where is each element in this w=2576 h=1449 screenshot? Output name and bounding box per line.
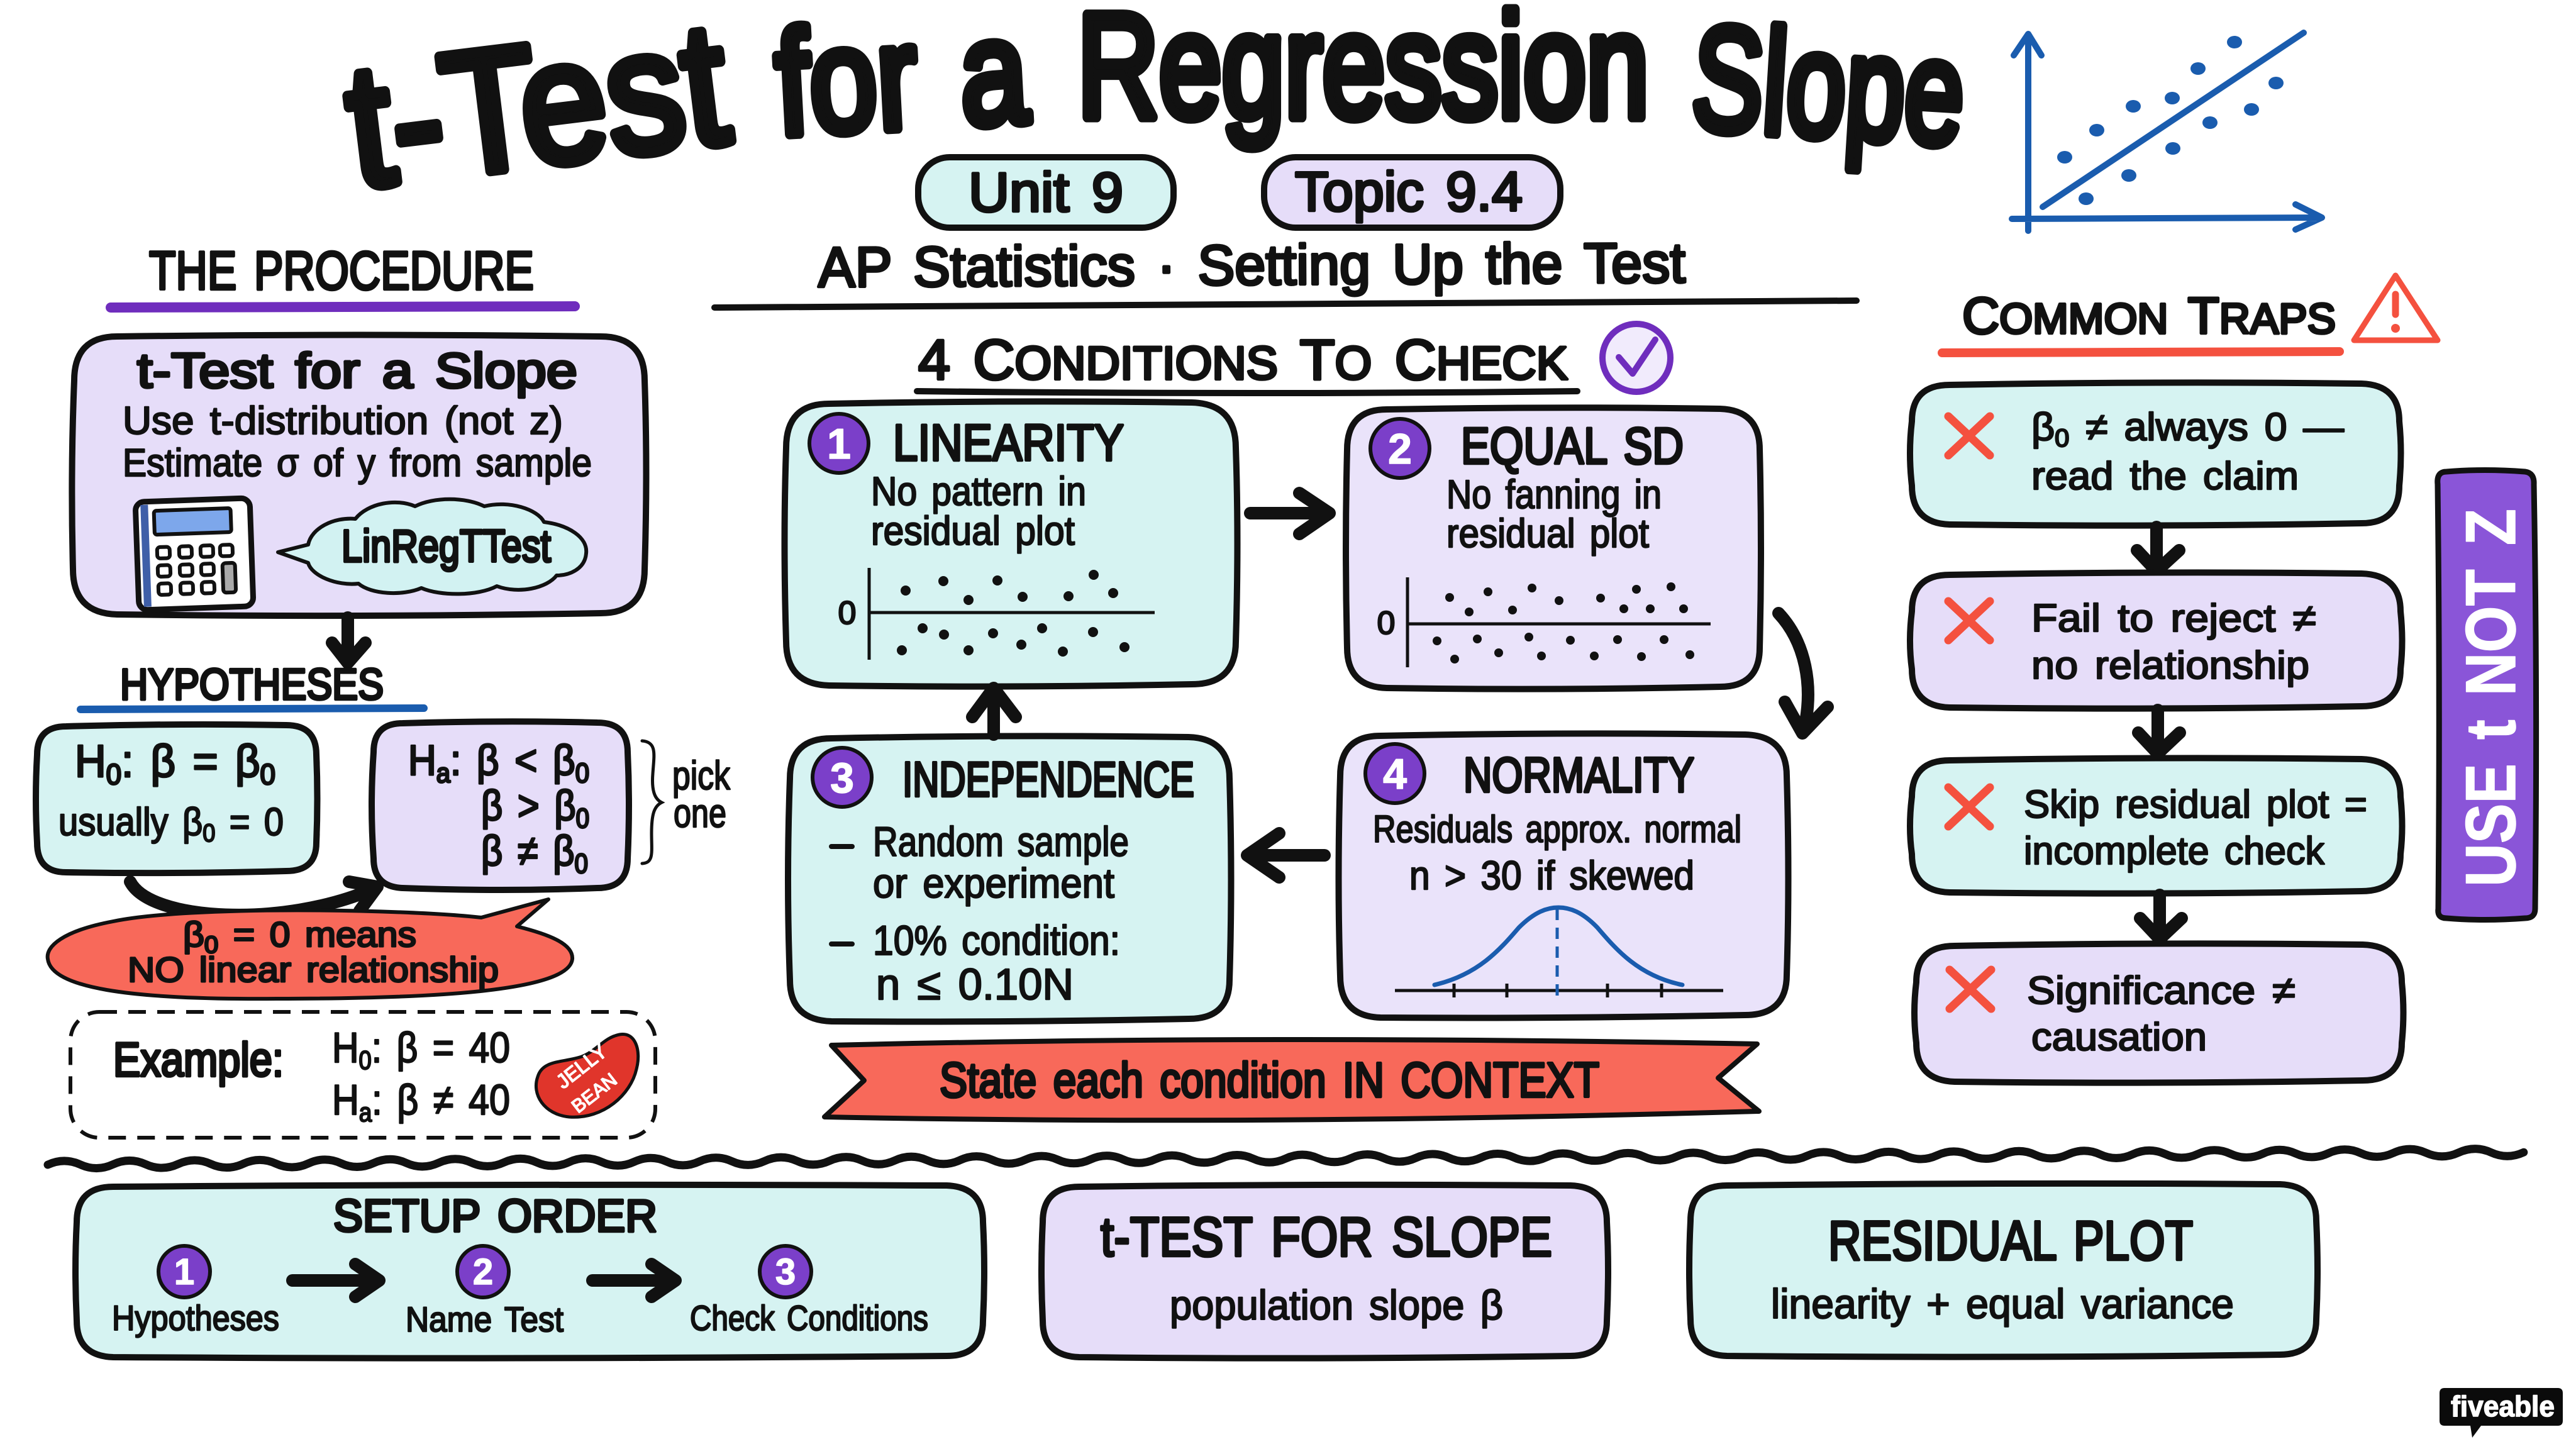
step 1: Hypotheses	[112, 1298, 279, 1338]
panel: condition 3 independence: or experiment	[873, 860, 1114, 906]
step 2: Name Test	[406, 1299, 564, 1339]
panel: condition 2 equal SD: EQUAL SD	[1461, 418, 1684, 475]
arrow: step 1 to 2	[292, 1264, 379, 1297]
panel: example: a	[359, 1097, 372, 1127]
step 2	[406, 1246, 564, 1339]
panel: condition 3 independence: Random sample	[873, 818, 1129, 865]
brace: pick one	[642, 741, 731, 863]
arrow: step 2 to 3	[592, 1264, 675, 1297]
panel: alternative hypothesis: β ≠ β	[481, 827, 588, 875]
heading: common traps: COMMON TRAPS	[1962, 287, 2336, 345]
icon: scatter plot with regression line	[2012, 33, 2322, 231]
panel: trap 3: incomplete check	[2024, 830, 2325, 873]
panel: condition 3 independence: INDEPENDENCE	[902, 752, 1194, 807]
callout: beta zero meaning: NO linear relationship	[128, 950, 499, 989]
panel: trap 1: 0	[2055, 425, 2069, 452]
badge 3	[813, 748, 872, 807]
panel: trap 4	[1914, 943, 2404, 1083]
panel: trap 2: no relationship	[2031, 644, 2309, 687]
wavy divider	[48, 1149, 2524, 1169]
badge 3: 3	[830, 754, 854, 802]
panel: condition 4 normality: NORMALITY	[1463, 747, 1694, 802]
panel: trap 1	[1910, 382, 2401, 526]
pill: Topic 9.4	[1264, 157, 1560, 228]
panel: null hypothesis: 0	[203, 819, 215, 847]
normal curve	[1395, 908, 1723, 1000]
panel: t-test for a slope: t-Test for a Slope	[137, 343, 577, 398]
panel: alternative hypothesis: 0	[575, 758, 589, 789]
panel: residual plot definition: linearity + equal variance	[1771, 1280, 2234, 1327]
arrow: trap 2 to 3	[2138, 710, 2180, 753]
arrow: procedure to hypotheses	[332, 618, 365, 663]
residual plot 1	[838, 568, 1155, 660]
panel: condition 1 linearity: LINEARITY	[893, 414, 1124, 472]
arrow: condition 3 to 1	[972, 688, 1016, 735]
banner: state in context	[824, 1040, 1759, 1120]
callout: use t not z: USE t NOT Z	[2451, 509, 2530, 887]
subtitle	[714, 232, 1857, 308]
panel: null hypothesis	[36, 724, 317, 873]
panel: trap 2	[1910, 572, 2402, 709]
panel: t-test for slope definition	[1041, 1185, 1608, 1358]
panel: condition 2 equal SD: residual plot	[1446, 511, 1649, 556]
panel: alternative hypothesis: : β < β	[450, 736, 575, 784]
step 3	[690, 1246, 928, 1338]
panel: null hypothesis: 0	[260, 758, 275, 791]
panel: null hypothesis: : β = β	[121, 736, 260, 787]
pill: Unit 9: Unit 9	[969, 161, 1123, 223]
panel: null hypothesis: H	[75, 736, 108, 787]
panel: t-test for a slope	[72, 335, 646, 616]
panel: example: H	[332, 1024, 363, 1072]
panel: trap 1: read the claim	[2031, 455, 2299, 498]
panel: trap 4: causation	[2031, 1016, 2207, 1059]
panel: condition 1 linearity: residual plot	[871, 508, 1075, 553]
panel: trap 2: Fail to reject ≠	[2031, 597, 2316, 640]
badge 4: 4	[1383, 750, 1407, 798]
panel: trap 1: β	[2031, 406, 2054, 449]
panel: t-test for slope definition: t-TEST FOR SLOPE	[1101, 1206, 1552, 1268]
subtitle: AP Statistics · Setting Up the Test	[818, 232, 1685, 299]
arrow: condition 1 to 2	[1250, 493, 1330, 534]
step 3: 3	[775, 1252, 796, 1292]
arrow: trap 3 to 4	[2140, 895, 2182, 939]
callout: beta zero meaning: = 0 means	[218, 914, 416, 954]
step 2: 2	[473, 1252, 493, 1292]
panel: alternative hypothesis: 0	[575, 848, 588, 879]
panel: residual plot definition	[1689, 1184, 2318, 1357]
speech cloud: LinRegTTest	[278, 499, 586, 594]
panel: condition 1 linearity: No pattern in	[871, 469, 1086, 514]
banner: state in context: State each condition IN CONTEXT	[940, 1052, 1599, 1108]
icon: calculator	[135, 498, 253, 610]
panel: alternative hypothesis: β > β	[481, 782, 589, 830]
arrow: null to alternative	[130, 882, 377, 915]
icon: warning triangle	[2354, 275, 2438, 340]
step 1: 1	[174, 1252, 194, 1292]
residual plot 1: 0	[838, 595, 856, 631]
panel: alternative hypothesis	[372, 721, 629, 890]
callout: beta zero meaning: β	[183, 914, 203, 954]
panel: alternative hypothesis: H	[408, 736, 439, 784]
panel: example: : β ≠ 40	[372, 1076, 510, 1124]
icon: purple check circle	[1602, 324, 1670, 392]
panel: null hypothesis: usually β	[58, 801, 218, 844]
panel: condition 1 linearity	[785, 401, 1238, 687]
badge 4	[1365, 744, 1424, 803]
panel: condition 3 independence: n ≤ 0.10N	[876, 960, 1074, 1009]
badge 1: 1	[827, 420, 851, 468]
panel: trap 4: Significance ≠	[2027, 969, 2296, 1013]
pill: Topic 9.4: Topic 9.4	[1295, 160, 1523, 223]
panel: example: 0	[359, 1045, 372, 1075]
panel: condition 4 normality: Residuals approx. normal	[1373, 808, 1741, 850]
badge 2: 2	[1388, 425, 1412, 473]
panel: null hypothesis: 0	[106, 758, 121, 791]
panel: residual plot definition: RESIDUAL PLOT	[1828, 1209, 2193, 1272]
callout: beta zero meaning: 0	[204, 932, 218, 958]
panel: condition 2 equal SD: No fanning in	[1446, 472, 1662, 517]
panel: t-test for a slope: Use t-distribution (not z)	[123, 399, 563, 443]
panel: example: : β = 40	[372, 1024, 510, 1072]
panel: trap 3	[1910, 758, 2402, 894]
heading: 4 conditions to check: 4 CONDITIONS TO CHECK	[918, 329, 1568, 392]
panel: trap 3: Skip residual plot =	[2024, 783, 2367, 826]
speech cloud: LinRegTTest: LinRegTTest	[341, 521, 551, 572]
residual plot 2: 0	[1377, 605, 1395, 641]
brace: pick one: one	[674, 791, 726, 836]
panel: condition 2 equal SD	[1346, 408, 1761, 689]
arrow: condition 2 to 4	[1779, 613, 1828, 733]
logo: fiveable: fiveable	[2451, 1390, 2555, 1423]
title	[337, 0, 1969, 225]
icon: jelly bean	[536, 1034, 638, 1118]
panel: alternative hypothesis: a	[436, 758, 451, 789]
panel: trap 1: ≠ always 0 —	[2069, 406, 2344, 449]
badge 1	[809, 414, 869, 473]
panel: null hypothesis: = 0	[215, 801, 284, 844]
heading: the procedure: THE PROCEDURE	[149, 241, 534, 301]
panel: condition 4 normality: n > 30 if skewed	[1409, 853, 1694, 898]
title: Slope	[1688, 0, 1969, 177]
callout: beta zero meaning	[48, 899, 572, 999]
logo: fiveable	[2440, 1388, 2563, 1438]
panel: condition 3 independence: 10% condition:	[873, 917, 1120, 963]
panel: alternative hypothesis: 0	[576, 803, 589, 834]
step 1	[112, 1246, 279, 1338]
icon: jelly bean: BEAN	[568, 1069, 621, 1118]
badge 2	[1370, 419, 1430, 478]
pill: Unit 9	[918, 157, 1174, 228]
panel: setup order: SETUP ORDER	[333, 1191, 657, 1241]
brace: pick one: pick	[672, 753, 731, 798]
step 3: Check Conditions	[690, 1298, 928, 1338]
icon: jelly bean: JELLY	[552, 1040, 611, 1093]
panel: example: Example:	[113, 1033, 284, 1087]
panel: t-test for slope definition: population slope β	[1170, 1282, 1503, 1328]
panel: condition 4 normality	[1338, 733, 1789, 1018]
panel: example	[70, 1012, 655, 1138]
panel: example: H	[332, 1076, 363, 1124]
heading: hypotheses: HYPOTHESES	[120, 660, 384, 709]
arrow: trap 1 to 2	[2137, 527, 2179, 571]
arrow: condition 4 to 3	[1247, 833, 1324, 877]
residual plot 2	[1377, 577, 1711, 667]
panel: t-test for a slope: Estimate σ of y from sample	[123, 441, 592, 485]
panel: condition 3 independence	[788, 736, 1231, 1021]
panel: setup order	[75, 1185, 984, 1358]
